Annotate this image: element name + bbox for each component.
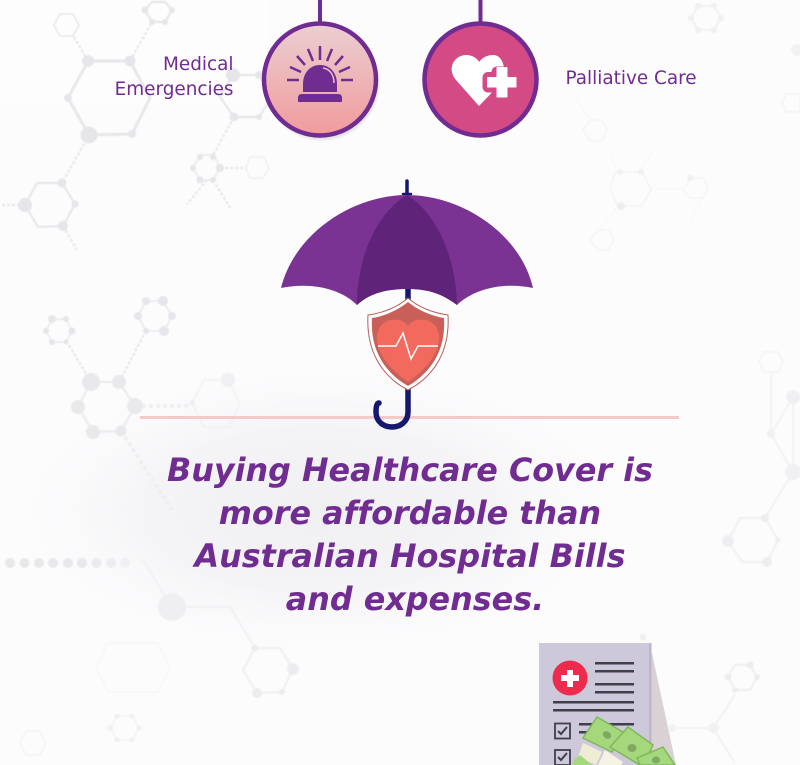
money bundles — [572, 717, 675, 765]
label: Medical Emergencies — [115, 54, 234, 100]
heading: more affordable than — [219, 495, 601, 532]
heading: Buying Healthcare Cover is — [167, 452, 653, 489]
icon: palliative care heart — [422, 0, 539, 138]
umbrella canopy — [281, 195, 533, 305]
icon: umbrella with shield — [281, 179, 533, 430]
umbrella shaft and hook — [376, 181, 411, 427]
divider line — [140, 416, 679, 419]
heading: and expenses. — [286, 581, 544, 618]
label: Medical Emergencies: Medical — [163, 54, 234, 75]
heading — [167, 452, 653, 618]
umbrella centre panel — [357, 195, 457, 305]
icon: medical emergencies siren — [262, 0, 380, 140]
label: Palliative Care: Palliative Care — [566, 68, 697, 88]
heading: Australian Hospital Bills — [194, 538, 626, 575]
shield — [368, 298, 448, 390]
label: Medical Emergencies: Emergencies — [115, 79, 234, 100]
